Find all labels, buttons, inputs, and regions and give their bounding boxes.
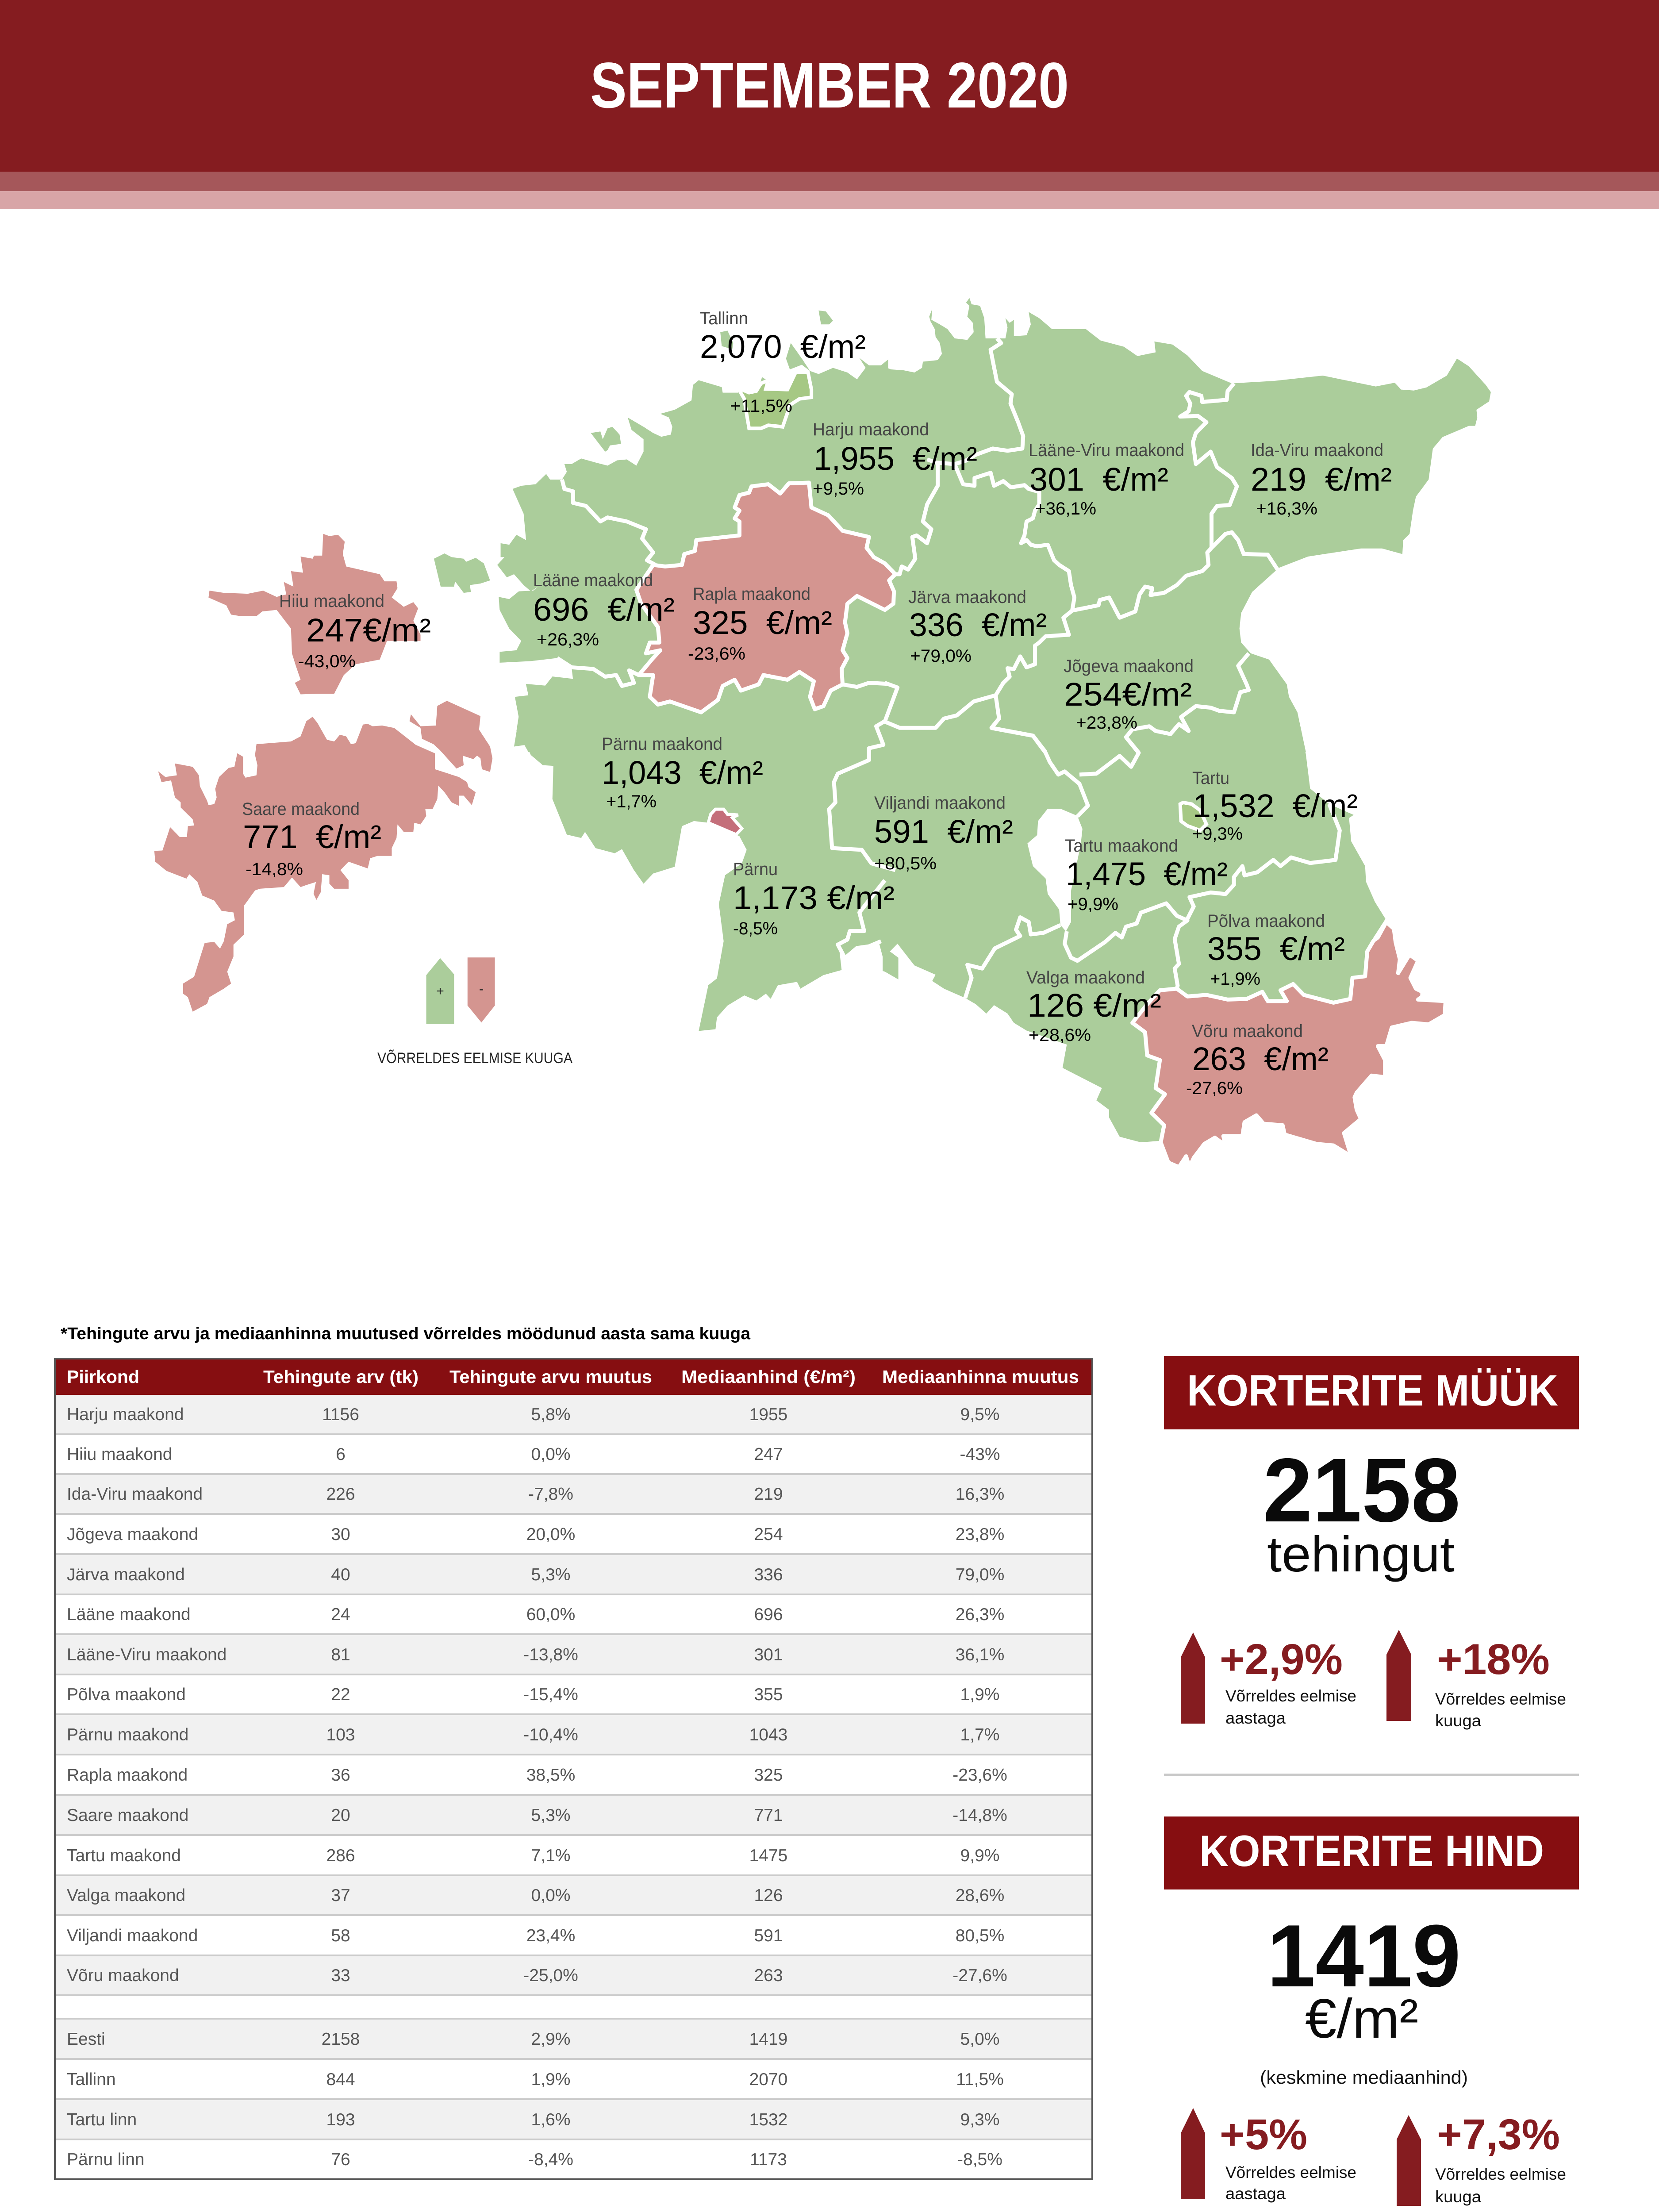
label: Ida-Viru maakond: +16,3%	[1256, 499, 1317, 518]
label: Ida-Viru maakond: 219 €/m²	[1251, 461, 1392, 498]
row: Pärnu maakond: 1,7%	[960, 1725, 999, 1744]
city: Parnu	[708, 809, 742, 834]
row: Tartu linn: 193	[326, 2110, 355, 2129]
label: Tartu: +9,3%	[1192, 824, 1243, 844]
label: Tallinn: Tallinn	[700, 309, 748, 328]
row: Võru maakond: Võru maakond	[67, 1966, 179, 1985]
table	[54, 1358, 1092, 2179]
row: Viljandi maakond: Viljandi maakond	[67, 1926, 198, 1945]
row: Tartu maakond: 7,1%	[531, 1846, 570, 1865]
label: Ida-Viru maakond: Ida-Viru maakond	[1251, 441, 1383, 460]
label: Lääne-Viru maakond: Lääne-Viru maakond	[1029, 441, 1184, 460]
row: Tartu maakond: 9,9%	[960, 1846, 999, 1865]
label: Jõgeva maakond	[1064, 657, 1194, 733]
table header: Mediaanhind (€/m²)	[681, 1367, 856, 1387]
row: Põlva maakond: 355	[754, 1685, 783, 1704]
row: Viljandi maakond: 23,4%	[526, 1926, 575, 1945]
row: Rapla maakond: -23,6%	[952, 1766, 1007, 1785]
city: Tallinn	[738, 373, 811, 428]
stat: +5%: +5%	[1220, 2110, 1307, 2158]
label: Võru maakond: -27,6%	[1186, 1079, 1243, 1098]
stat: +18%: kuuga	[1435, 1712, 1481, 1730]
row: Põlva maakond: -15,4%	[523, 1685, 578, 1704]
row: Hiiu maakond: 0,0%	[531, 1445, 570, 1464]
row: Põlva maakond	[67, 1685, 999, 1704]
label: Jõgeva maakond: 254€/m²	[1064, 676, 1192, 713]
label: Valga maakond	[1026, 968, 1161, 1045]
stat: +5%: Võrreldes eelmise	[1225, 2163, 1356, 2181]
row: Saare maakond: 20	[331, 1806, 350, 1825]
label: Valga maakond: +28,6%	[1029, 1025, 1091, 1045]
row: Viljandi maakond: 591	[754, 1926, 783, 1945]
row: Saare maakond: -14,8%	[952, 1806, 1007, 1825]
row: Tallinn: 11,5%	[956, 2070, 1004, 2089]
stat: +5%	[1181, 2108, 1356, 2203]
mainland land mass	[434, 298, 1491, 1142]
label: Lääne-Viru maakond	[1029, 441, 1184, 518]
stat: +7,3%	[1397, 2110, 1566, 2206]
row: Pärnu linn	[67, 2150, 1002, 2169]
label: Rapla maakond: -23,6%	[688, 644, 745, 664]
row: Hiiu maakond	[67, 1445, 1000, 1464]
label: Järva maakond: Järva maakond	[908, 588, 1026, 607]
heading: korterite hind: KORTERITE HIND	[1199, 1826, 1544, 1875]
label: Saare maakond: -14,8%	[246, 860, 303, 879]
row: Tartu linn: 1,6%	[531, 2110, 570, 2129]
label: Tartu maakond	[1065, 836, 1228, 914]
row: Pärnu linn: Pärnu linn	[67, 2150, 145, 2169]
label: Pärnu: 1,173 €/m²	[733, 879, 895, 916]
row: Tartu linn: 9,3%	[960, 2110, 999, 2129]
label: Tartu maakond: +9,9%	[1068, 895, 1118, 914]
label: Lääne-Viru maakond: +36,1%	[1035, 499, 1096, 518]
row: Pärnu linn: 1173	[750, 2150, 787, 2169]
label: Harju maakond: +9,5%	[813, 479, 864, 499]
unit: euro per square metre: €/m²	[1305, 1988, 1418, 2050]
row: Eesti: 5,0%	[960, 2030, 999, 2049]
row: Lääne maakond: 24	[331, 1605, 350, 1624]
table header	[54, 1358, 1092, 1395]
stat: +2,9%	[1181, 1632, 1356, 1727]
map legend: VÕRRELDES EELMISE KUUGA	[377, 1050, 572, 1067]
table header: Tehingute arvu muutus	[449, 1367, 652, 1387]
label: Rapla maakond: Rapla maakond	[693, 584, 810, 604]
label: Tartu: Tartu	[1192, 768, 1229, 788]
label: Võru maakond	[1186, 1022, 1329, 1098]
row: Pärnu maakond: 103	[326, 1725, 355, 1744]
row: Lääne-Viru maakond: 301	[754, 1645, 783, 1664]
stat: +18%: Võrreldes eelmise	[1435, 1690, 1566, 1708]
row: Saare maakond	[54, 1795, 1092, 1835]
row: Viljandi maakond: 80,5%	[956, 1926, 1004, 1945]
label: Jõgeva maakond: Jõgeva maakond	[1064, 657, 1194, 676]
row: Hiiu maakond: Hiiu maakond	[67, 1445, 172, 1464]
row: Valga maakond	[54, 1875, 1092, 1915]
label: Viljandi maakond: Viljandi maakond	[874, 793, 1006, 813]
label: Lääne maakond	[533, 571, 675, 649]
row: Lääne maakond: 60,0%	[526, 1605, 575, 1624]
row: Tartu linn	[54, 2099, 1092, 2139]
label: Võru maakond: 263 €/m²	[1192, 1041, 1329, 1077]
row: Järva maakond: 40	[331, 1565, 350, 1584]
row: Lääne maakond: Lääne maakond	[67, 1605, 191, 1624]
label: Jõgeva maakond: +23,8%	[1076, 713, 1137, 733]
label: Järva maakond: 336 €/m²	[909, 607, 1047, 643]
row: Saare maakond: 5,3%	[531, 1806, 570, 1825]
label: Põlva maakond: Põlva maakond	[1207, 911, 1325, 931]
row: Pärnu maakond: -10,4%	[523, 1725, 578, 1744]
row: Hiiu maakond: -43%	[960, 1445, 1000, 1464]
label: Harju maakond	[813, 420, 977, 499]
heading: korterite hind	[1164, 1816, 1579, 1889]
label: Saare maakond: 771 €/m²	[243, 818, 381, 855]
map of Estonia	[154, 298, 1491, 1167]
row: Ida-Viru maakond: 226	[326, 1485, 355, 1504]
table header: Tehingute arv (tk)	[263, 1367, 419, 1387]
label: Pärnu maakond: +1,7%	[606, 792, 657, 811]
row: Saare maakond: Saare maakond	[67, 1806, 188, 1825]
row: Põlva maakond: 22	[331, 1685, 350, 1704]
row: Ida-Viru maakond: 219	[754, 1485, 783, 1504]
row: Valga maakond: 37	[331, 1886, 350, 1905]
stat: +18%: +18%	[1437, 1635, 1550, 1683]
label: Lääne maakond: 696 €/m²	[533, 591, 675, 628]
map legend	[377, 957, 572, 1067]
row: Tartu maakond	[67, 1846, 999, 1865]
label: Järva maakond: +79,0%	[910, 646, 972, 666]
stat: +5%: aastaga	[1225, 2185, 1286, 2203]
row: Harju maakond	[54, 1395, 1092, 1434]
row: Jõgeva maakond: 30	[331, 1525, 350, 1544]
row: Tallinn: 2070	[749, 2070, 787, 2089]
label: Rapla maakond	[688, 584, 832, 664]
row: Tallinn	[67, 2070, 1004, 2089]
row: Pärnu maakond: 1043	[749, 1725, 787, 1744]
label: Lääne maakond: Lääne maakond	[533, 571, 653, 590]
label: Harju maakond: Harju maakond	[813, 420, 929, 439]
row: Põlva maakond: 1,9%	[960, 1685, 999, 1704]
big number: price: 1419	[1267, 1907, 1461, 2005]
row: Hiiu maakond: 6	[336, 1445, 346, 1464]
stat: +18%	[1386, 1630, 1566, 1730]
label: Harju maakond: 1,955 €/m²	[814, 440, 977, 477]
big number: deals: 2158	[1263, 1440, 1460, 1541]
row: Pärnu linn: -8,4%	[528, 2150, 573, 2169]
row: Tartu linn: 1532	[749, 2110, 787, 2129]
row: Jõgeva maakond: 254	[754, 1525, 783, 1544]
county: Voru	[1133, 922, 1445, 1167]
row: Jõgeva maakond: Jõgeva maakond	[67, 1525, 198, 1544]
row: Tallinn: 1,9%	[531, 2070, 570, 2089]
label: Valga maakond: 126 €/m²	[1027, 987, 1161, 1024]
row: Tartu linn: Tartu linn	[67, 2110, 137, 2129]
label: Tallinn	[700, 309, 866, 416]
row: Järva maakond: 79,0%	[956, 1565, 1004, 1584]
row: Valga maakond: 126	[754, 1886, 783, 1905]
row: Lääne-Viru maakond: 36,1%	[956, 1645, 1004, 1664]
label: Tartu maakond: Tartu maakond	[1065, 836, 1178, 856]
label: Hiiu maakond	[279, 591, 431, 671]
row: Jõgeva maakond: 20,0%	[526, 1525, 575, 1544]
header band	[0, 0, 1659, 209]
label: Pärnu maakond	[602, 734, 763, 811]
map legend: +	[436, 984, 444, 998]
caption: keskmine mediaanhind: (keskmine mediaanhind)	[1260, 2067, 1468, 2088]
row: Jõgeva maakond	[67, 1525, 1004, 1544]
row: Valga maakond: 28,6%	[956, 1886, 1004, 1905]
row: Ida-Viru maakond: -7,8%	[528, 1485, 573, 1504]
label: Tartu: 1,532 €/m²	[1193, 787, 1358, 824]
row: Lääne-Viru maakond: 81	[331, 1645, 350, 1664]
row: Põlva maakond: Põlva maakond	[67, 1685, 186, 1704]
label: Viljandi maakond: 591 €/m²	[874, 813, 1013, 850]
row: Saare maakond: 771	[754, 1806, 783, 1825]
label: Pärnu: -8,5%	[733, 919, 778, 938]
row: Eesti: 1419	[749, 2030, 787, 2049]
label: Tartu	[1192, 768, 1358, 844]
heading: korterite müük: KORTERITE MÜÜK	[1187, 1366, 1558, 1415]
row: Pärnu linn: -8,5%	[957, 2150, 1002, 2169]
row: Rapla maakond	[67, 1766, 1007, 1785]
table footnote: *Tehingute arvu ja mediaanhinna muutused võrreldes möödunud aasta sama kuuga	[61, 1325, 751, 1343]
row: Tartu maakond: 1475	[749, 1846, 787, 1865]
row: Tartu maakond: Tartu maakond	[67, 1846, 181, 1865]
row: Lääne-Viru maakond: Lääne-Viru maakond	[67, 1645, 227, 1664]
row: Jõgeva maakond: 23,8%	[956, 1525, 1004, 1544]
table header: Piirkond	[67, 1367, 139, 1387]
county borders	[557, 338, 1340, 998]
row: Harju maakond: 1955	[749, 1405, 787, 1424]
stat: +7,3%: kuuga	[1435, 2188, 1481, 2206]
label: Pärnu: Pärnu	[733, 860, 778, 879]
row: Rapla maakond: 325	[754, 1766, 783, 1785]
label: Valga maakond: Valga maakond	[1026, 968, 1145, 987]
label: Lääne-Viru maakond: 301 €/m²	[1029, 461, 1168, 498]
row: Harju maakond: 9,5%	[960, 1405, 999, 1424]
row: Võru maakond: 263	[754, 1966, 783, 1985]
row: Harju maakond: 1156	[322, 1405, 359, 1424]
heading: korterite müük	[1164, 1356, 1579, 1429]
row: Rapla maakond: Rapla maakond	[67, 1766, 188, 1785]
label: Saare maakond: Saare maakond	[242, 799, 360, 819]
label: Ida-Viru maakond	[1251, 441, 1392, 518]
row: Pärnu maakond	[54, 1714, 1092, 1755]
row: Võru maakond: -25,0%	[523, 1966, 578, 1985]
row: Valga maakond: 0,0%	[531, 1886, 570, 1905]
row: Harju maakond: Harju maakond	[67, 1405, 184, 1424]
city: Tartu	[1180, 803, 1206, 830]
label: Lääne maakond: +26,3%	[537, 630, 599, 649]
label: Pärnu maakond: 1,043 €/m²	[602, 754, 763, 791]
row: Järva maakond: 336	[754, 1565, 783, 1584]
label: Viljandi maakond: +80,5%	[874, 854, 937, 873]
row: Lääne-Viru maakond: -13,8%	[523, 1645, 578, 1664]
unit: tehingut: tehingut	[1267, 1526, 1455, 1582]
stat: +2,9%: aastaga	[1225, 1709, 1286, 1727]
table header: Mediaanhinna muutus	[882, 1367, 1079, 1387]
map legend: -	[479, 982, 484, 996]
row: Ida-Viru maakond: Ida-Viru maakond	[67, 1485, 203, 1504]
stat: +2,9%: Võrreldes eelmise	[1225, 1687, 1356, 1705]
label: Pärnu maakond: Pärnu maakond	[602, 734, 722, 754]
row: Lääne-Viru maakond	[54, 1634, 1092, 1674]
county: Rapla	[636, 483, 895, 712]
row: Võru maakond: 33	[331, 1966, 350, 1985]
label: Järva maakond	[908, 588, 1047, 666]
stat: +7,3%: Võrreldes eelmise	[1435, 2165, 1566, 2183]
stat: +7,3%: +7,3%	[1437, 2110, 1560, 2158]
label: Põlva maakond: +1,9%	[1210, 969, 1260, 989]
row: Viljandi maakond: 58	[331, 1926, 350, 1945]
row: Viljandi maakond	[67, 1926, 1004, 1945]
label: Põlva maakond: 355 €/m²	[1207, 930, 1345, 967]
row: Ida-Viru maakond	[54, 1474, 1092, 1514]
row: Eesti: 2158	[322, 2030, 360, 2049]
label: Tallinn: +11,5%	[730, 396, 792, 416]
label: Viljandi maakond	[874, 793, 1013, 873]
label: Pärnu	[733, 860, 895, 938]
row: Tallinn: Tallinn	[67, 2070, 116, 2089]
row: Lääne maakond: 26,3%	[956, 1605, 1004, 1624]
row: Lääne maakond	[67, 1605, 1004, 1624]
row: Valga maakond: Valga maakond	[67, 1886, 185, 1905]
row: Rapla maakond: 38,5%	[526, 1766, 575, 1785]
row: Hiiu maakond: 247	[754, 1445, 783, 1464]
panel: korterite hind	[1164, 1816, 1579, 2206]
row: Pärnu maakond: Pärnu maakond	[67, 1725, 188, 1744]
row: Eesti	[54, 2019, 1092, 2059]
county: Hiiu	[208, 534, 421, 694]
stat: +2,9%: +2,9%	[1220, 1635, 1343, 1683]
label: Hiiu maakond: 247€/m²	[306, 612, 431, 649]
panel: korterite müük	[1164, 1356, 1579, 1730]
label: Rapla maakond: 325 €/m²	[693, 604, 832, 641]
row: Lääne maakond: 696	[754, 1605, 783, 1624]
row: Pärnu linn: 76	[331, 2150, 350, 2169]
label: Saare maakond	[242, 799, 381, 879]
row: Järva maakond	[54, 1554, 1092, 1594]
row: Järva maakond: 5,3%	[531, 1565, 570, 1584]
label: Võru maakond: Võru maakond	[1192, 1022, 1303, 1041]
label: Hiiu maakond: -43,0%	[298, 652, 356, 671]
row: Järva maakond: Järva maakond	[67, 1565, 185, 1584]
row: Ida-Viru maakond: 16,3%	[956, 1485, 1004, 1504]
row: Eesti: Eesti	[67, 2030, 105, 2049]
row: Tallinn: 844	[326, 2070, 355, 2089]
label: Põlva maakond	[1207, 911, 1345, 989]
row: Eesti: 2,9%	[531, 2030, 570, 2049]
row: Tartu maakond: 286	[326, 1846, 355, 1865]
row: Harju maakond: 5,8%	[531, 1405, 570, 1424]
title: SEPTEMBER 2020	[590, 49, 1069, 121]
county: Saare	[154, 701, 492, 1012]
label: Tallinn: 2,070 €/m²	[700, 328, 866, 365]
row: Võru maakond	[54, 1955, 1092, 1995]
label: Tartu maakond: 1,475 €/m²	[1066, 856, 1228, 892]
row: Võru maakond: -27,6%	[952, 1966, 1007, 1985]
label: Hiiu maakond: Hiiu maakond	[279, 591, 384, 611]
row: Rapla maakond: 36	[331, 1766, 350, 1785]
lake Vortsjarv	[1027, 809, 1083, 931]
